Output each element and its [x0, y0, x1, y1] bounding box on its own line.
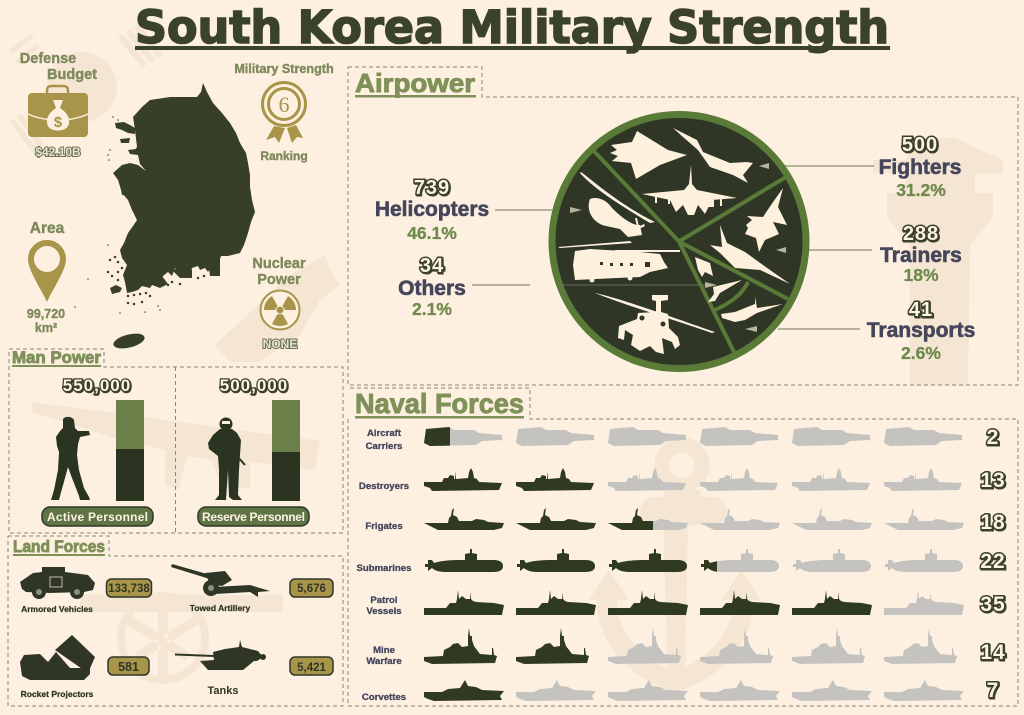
- row: destroyers: 13: [980, 469, 1006, 492]
- armored vehicles value: [106, 579, 152, 597]
- reserve personnel value: 500,000: [220, 376, 288, 395]
- chart leader arrows: [560, 163, 786, 332]
- defense budget heading: Defense: [20, 51, 76, 67]
- rocket projectors label: Rocket Projectors: [21, 689, 94, 699]
- stat: transports: 2.6%: [901, 343, 941, 363]
- stat: trainers: Trainers: [880, 244, 962, 267]
- icon: location pin: [28, 240, 66, 302]
- row: submarines: 22: [980, 550, 1006, 573]
- area value: 99,720: [27, 307, 65, 321]
- row: patrol vessels: 35: [980, 593, 1006, 616]
- stat: fighters: [879, 134, 961, 200]
- stat: trainers: 18%: [903, 265, 939, 285]
- stat: helicopters: Helicopters: [375, 198, 489, 221]
- leader lines: [472, 166, 874, 329]
- panel: country overview: [20, 51, 334, 351]
- icon: armored vehicle: [20, 567, 95, 599]
- towed artillery value: 5,676: [297, 583, 326, 595]
- icon: briefcase with money bag: [28, 86, 88, 137]
- tanks value: 5,421: [297, 662, 326, 674]
- row: frigates: Frigates: [365, 521, 403, 532]
- row: aircraft carriers: [366, 427, 1000, 450]
- stat: others: [398, 255, 466, 319]
- stat: fighters: 500: [902, 134, 938, 156]
- rocket projectors value: [108, 657, 149, 675]
- naval forces heading: Naval Forces: [355, 388, 524, 419]
- stat: others: 2.1%: [412, 299, 452, 319]
- stat: helicopters: 46.1%: [407, 223, 457, 243]
- row: mine warfare: [366, 628, 1006, 667]
- active personnel pill: [42, 507, 153, 526]
- stat: helicopters: 739: [414, 177, 450, 199]
- row: aircraft carriers: Carriers: [366, 441, 402, 452]
- row: patrol vessels: [366, 590, 1006, 617]
- panel border: [8, 536, 343, 706]
- nuclear power heading: Power: [257, 272, 301, 288]
- ranking label: Ranking: [260, 149, 308, 163]
- panel: land forces: [8, 536, 343, 706]
- stat: fighters: 31.2%: [896, 180, 946, 200]
- watermark: flag trigrams and circle: [9, 24, 163, 152]
- man power heading: Man Power: [12, 348, 101, 367]
- stat: transports: [867, 299, 975, 363]
- map of South Korea: [75, 83, 255, 351]
- stat: trainers: 288: [903, 223, 939, 245]
- reserve bar: [272, 400, 300, 501]
- towed artillery value: [290, 579, 333, 597]
- title: South Korea Military Strength: [135, 1, 889, 54]
- icon: rocket projector: [20, 635, 95, 680]
- icon: tank: [175, 640, 266, 670]
- row: mine warfare: Warfare: [366, 656, 402, 667]
- icon: ranking medal: [262, 82, 306, 143]
- defense budget heading: Budget: [47, 67, 97, 83]
- panel border: [348, 388, 1018, 706]
- rocket projectors value: 581: [118, 660, 139, 674]
- reserve personnel pill: [198, 507, 309, 526]
- area value: km²: [35, 321, 57, 335]
- nuclear power heading: Nuclear: [252, 256, 306, 272]
- icon: briefcase with money bag: $: [54, 114, 63, 131]
- stat: trainers: [880, 223, 962, 285]
- defense budget heading: [20, 51, 97, 83]
- row: aircraft carriers: 2: [987, 426, 999, 449]
- row: corvettes: Corvettes: [362, 692, 406, 703]
- row: frigates: 18: [980, 511, 1006, 534]
- row: mine warfare: 14: [980, 641, 1006, 664]
- tanks label: Tanks: [208, 685, 238, 697]
- helicopter silhouettes: [558, 172, 715, 354]
- area value: [27, 307, 65, 335]
- panel: airpower: [348, 67, 1018, 385]
- nuclear power heading: [252, 256, 306, 288]
- row: frigates: [365, 508, 1006, 534]
- budget value: $42.10B: [35, 145, 81, 159]
- watermark: rifle: [32, 402, 320, 490]
- row: destroyers: [359, 468, 1006, 492]
- armored vehicles value: 133,738: [108, 583, 150, 595]
- row: aircraft carriers: Aircraft: [367, 428, 402, 439]
- row: corvettes: 7: [987, 679, 999, 702]
- pie dividers: [593, 150, 788, 352]
- stat: others: 34: [420, 255, 444, 277]
- icon: radiation symbol: [260, 290, 300, 330]
- panel: naval forces: [348, 388, 1018, 706]
- row: patrol vessels: Patrol: [370, 595, 398, 606]
- military strength heading: Military Strength: [234, 62, 334, 76]
- row: corvettes: [362, 679, 999, 703]
- reserve personnel pill: Reserve Personnel: [202, 510, 305, 524]
- pie chart with aircraft: [552, 114, 806, 368]
- transport aircraft silhouettes: [708, 280, 783, 322]
- icon: reserve soldier: [208, 418, 245, 500]
- land forces heading: Land Forces: [13, 537, 105, 556]
- stat: others: Others: [398, 277, 466, 300]
- panel border: [348, 67, 1018, 385]
- row: mine warfare: Mine: [373, 645, 395, 656]
- active bar: [116, 400, 144, 501]
- helicopter window details: [600, 262, 666, 326]
- towed artillery label: Towed Artillery: [190, 603, 250, 613]
- row: destroyers: Destroyers: [359, 481, 409, 492]
- active personnel pill: Active Personnel: [47, 510, 148, 524]
- stat: transports: Transports: [867, 319, 975, 342]
- row: patrol vessels: Vessels: [366, 606, 402, 617]
- icon: towed artillery: [171, 564, 270, 597]
- stat: transports: 41: [909, 299, 933, 321]
- trainer aircraft silhouettes: [695, 188, 790, 284]
- watermark: watchtower: [873, 138, 1003, 385]
- watermark: bomb: [215, 255, 340, 362]
- tanks value: [290, 657, 333, 675]
- icon: active soldier: [51, 417, 90, 500]
- watermark: cannon wheel: [80, 595, 283, 680]
- stat: fighters: Fighters: [879, 156, 961, 179]
- active personnel value: 550,000: [63, 376, 131, 395]
- panel: man power: [9, 348, 343, 533]
- row: submarines: [357, 549, 1006, 574]
- stat: helicopters: [375, 177, 489, 243]
- fighter aircraft silhouettes: [610, 128, 753, 215]
- icon: ranking medal: 6: [278, 92, 290, 117]
- watermark: anchor: [589, 445, 761, 682]
- panel border: [9, 349, 343, 533]
- nuclear value: NONE: [263, 337, 297, 351]
- airpower heading: Airpower: [355, 68, 475, 98]
- row: submarines: Submarines: [357, 563, 411, 574]
- armored vehicles label: Armored Vehicles: [21, 604, 93, 614]
- area heading: Area: [30, 220, 65, 237]
